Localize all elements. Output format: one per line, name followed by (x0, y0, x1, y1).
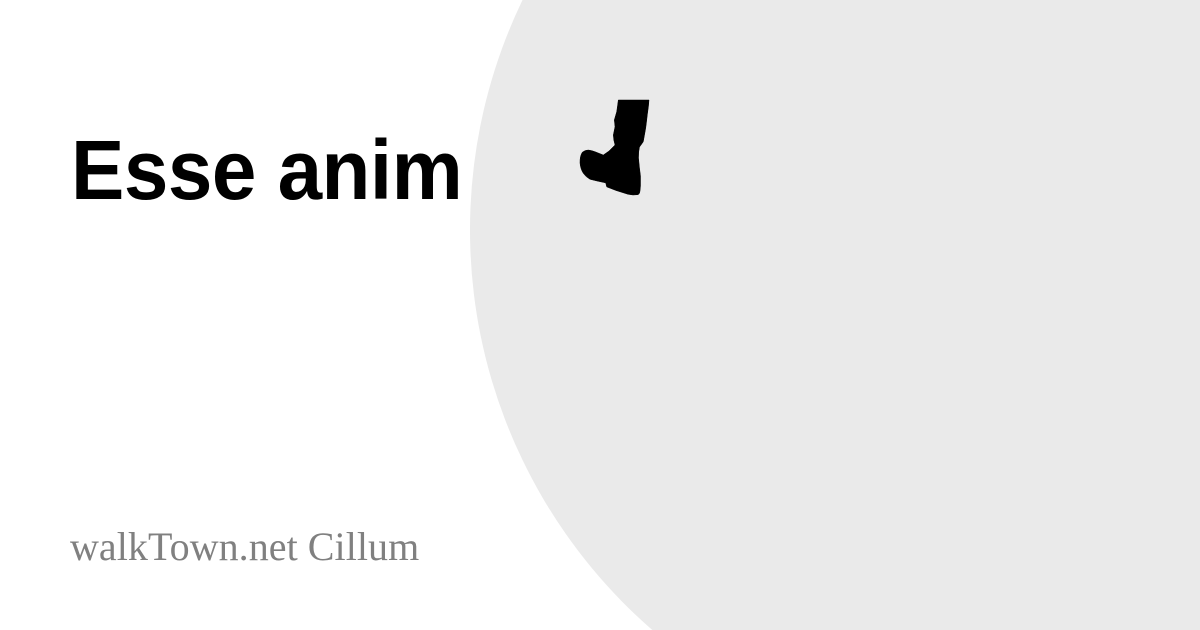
icon: boot (580, 100, 649, 195)
grey circle (470, 0, 1200, 630)
footer text: walkTown.net Cillum (70, 524, 419, 569)
title: Esse anim (71, 123, 462, 217)
